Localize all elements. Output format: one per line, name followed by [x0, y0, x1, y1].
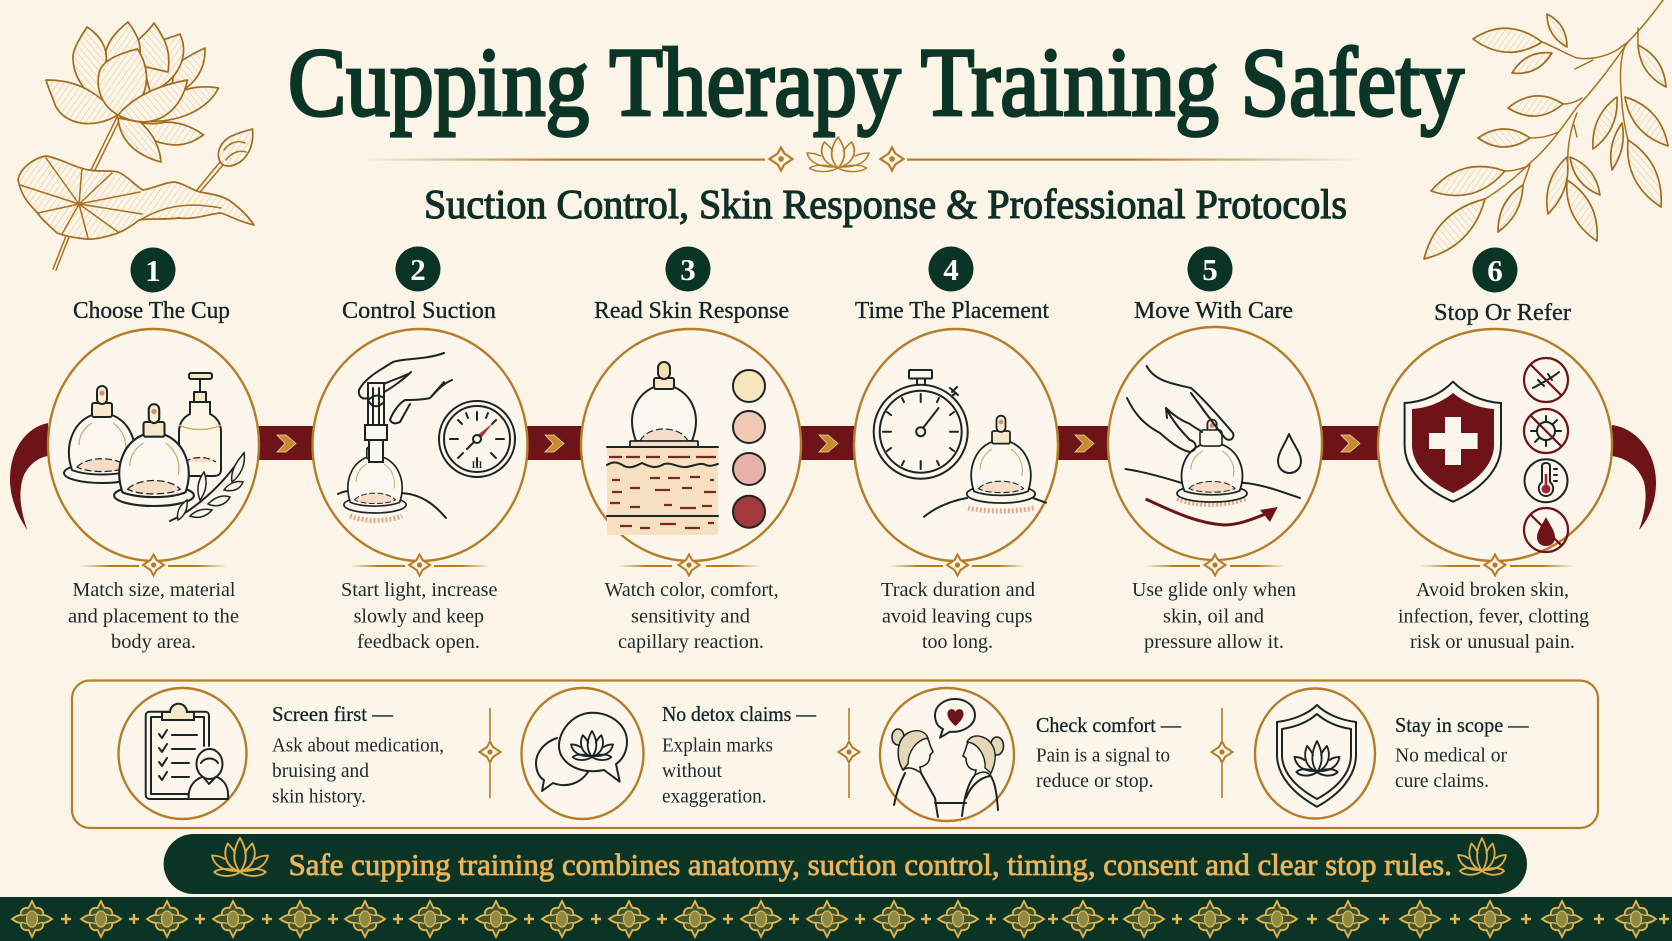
description: Watch color, comfort, — [605, 579, 779, 601]
title: Cupping Therapy Training Safety — [288, 29, 1464, 136]
number badge 6: 6 — [1487, 253, 1503, 288]
text: check comfort: Pain is a signal to — [1036, 745, 1170, 767]
number badge 4 — [928, 246, 974, 292]
description: Match size, material — [72, 579, 236, 601]
description: capillary reaction. — [618, 631, 764, 653]
text: screen first — [272, 702, 444, 808]
panel: step 1 choose the cup — [48, 248, 259, 653]
description: skin, oil and — [1163, 606, 1264, 628]
description: and placement to the — [68, 606, 239, 628]
text: check comfort: reduce or stop. — [1036, 770, 1154, 792]
circle frame with hand pump and gauge icon: III — [472, 460, 483, 470]
footer ornament band — [0, 897, 1672, 941]
circle frame with hand gliding cup icon — [1108, 327, 1322, 560]
description: pressure allow it. — [1144, 631, 1284, 653]
circle frame with shield and warning icons — [1378, 329, 1612, 561]
text: no detox claims: Explain marks — [662, 735, 773, 757]
panel: step 6 stop or refer — [1378, 248, 1612, 653]
description: risk or unusual pain. — [1410, 631, 1575, 653]
description — [1398, 579, 1589, 653]
panel: protocol notes — [72, 680, 1598, 828]
divider ornament — [618, 554, 760, 576]
icon: two people with heart speech bubble — [880, 688, 1014, 821]
number badge 3 — [666, 246, 710, 292]
heading: control suction: Control Suction — [342, 298, 496, 324]
divider ornament — [350, 554, 489, 576]
number badge 2 — [396, 246, 440, 292]
text: no detox claims: without — [662, 760, 722, 782]
text: check comfort — [1036, 713, 1181, 792]
icon: speech bubbles with lotus — [522, 688, 644, 819]
description: Avoid broken skin, — [1416, 579, 1569, 601]
description: sensitivity and — [631, 606, 750, 628]
callout banner — [164, 834, 1527, 894]
text: screen first: Screen first — — [272, 702, 393, 726]
circle frame with cups and bottle icon — [48, 329, 259, 561]
divider ornament — [889, 554, 1026, 576]
text: screen first: Ask about medication, — [272, 735, 444, 757]
icon: lotus right — [1458, 838, 1506, 875]
description — [341, 579, 498, 653]
description — [881, 579, 1035, 653]
heading: read skin response: Read Skin Response — [594, 298, 789, 324]
panel: step 3 read skin response — [581, 246, 801, 653]
banner text: Safe cupping training combines anatomy, suction control, timing, consent and clear stop rules. — [289, 847, 1452, 882]
illustration: leaf branch — [1424, 0, 1668, 259]
divider ornament — [1145, 554, 1285, 576]
icon: shield with lotus — [1255, 688, 1375, 818]
number badge 6 — [1472, 248, 1518, 292]
description — [1132, 579, 1296, 653]
text: no detox claims: No detox claims — — [662, 702, 816, 726]
description: too long. — [922, 631, 993, 653]
description: infection, fever, clotting — [1398, 606, 1589, 628]
description: Use glide only when — [1132, 579, 1296, 601]
text: stay in scope — [1395, 713, 1529, 792]
title divider with lotus — [360, 137, 1362, 172]
text: stay in scope: cure claims. — [1395, 770, 1489, 792]
number badge 2: 2 — [410, 252, 426, 287]
panel: step 5 move with care — [1108, 246, 1322, 653]
circle frame with stopwatch and cup icon — [854, 329, 1058, 561]
number badge 5 — [1188, 246, 1232, 292]
heading: time the placement: Time The Placement — [855, 298, 1049, 324]
panel: step 4 time the placement — [854, 246, 1058, 653]
description: slowly and keep — [354, 606, 484, 628]
description: Track duration and — [881, 579, 1035, 601]
heading: stop or refer: Stop Or Refer — [1434, 300, 1571, 326]
panel: step 2 control suction — [312, 246, 528, 653]
text: stay in scope: Stay in scope — — [1395, 713, 1529, 737]
text: no detox claims — [662, 702, 816, 808]
description: feedback open. — [357, 631, 480, 653]
illustration: lotus flower and leaf — [18, 22, 254, 270]
text: check comfort: Check comfort — — [1036, 713, 1181, 737]
text: no detox claims: exaggeration. — [662, 786, 767, 808]
description — [605, 579, 779, 653]
description: avoid leaving cups — [882, 606, 1033, 628]
description: body area. — [111, 631, 196, 653]
text: screen first: skin history. — [272, 786, 366, 808]
circle frame with hand pump and gauge icon — [312, 329, 528, 561]
description: Start light, increase — [341, 579, 498, 601]
text: stay in scope: No medical or — [1395, 745, 1507, 767]
icon: clipboard and person — [118, 688, 246, 819]
circle frame with skin cross-section and swatches — [581, 329, 801, 561]
heading: move with care: Move With Care — [1134, 298, 1293, 324]
subtitle: Suction Control, Skin Response & Professional Protocols — [424, 181, 1347, 227]
description — [68, 579, 239, 653]
divider ornament — [1420, 554, 1574, 576]
divider ornament — [80, 554, 227, 576]
heading: choose the cup: Choose The Cup — [73, 298, 230, 324]
number badge 4: 4 — [943, 252, 959, 287]
number badge 3: 3 — [680, 252, 696, 287]
number badge 1 — [130, 248, 176, 292]
ribbon connector with arrows — [10, 423, 1656, 530]
number badge 5: 5 — [1202, 252, 1218, 287]
number badge 1: 1 — [145, 253, 161, 288]
text: screen first: bruising and — [272, 760, 369, 782]
icon: lotus left — [212, 838, 268, 876]
